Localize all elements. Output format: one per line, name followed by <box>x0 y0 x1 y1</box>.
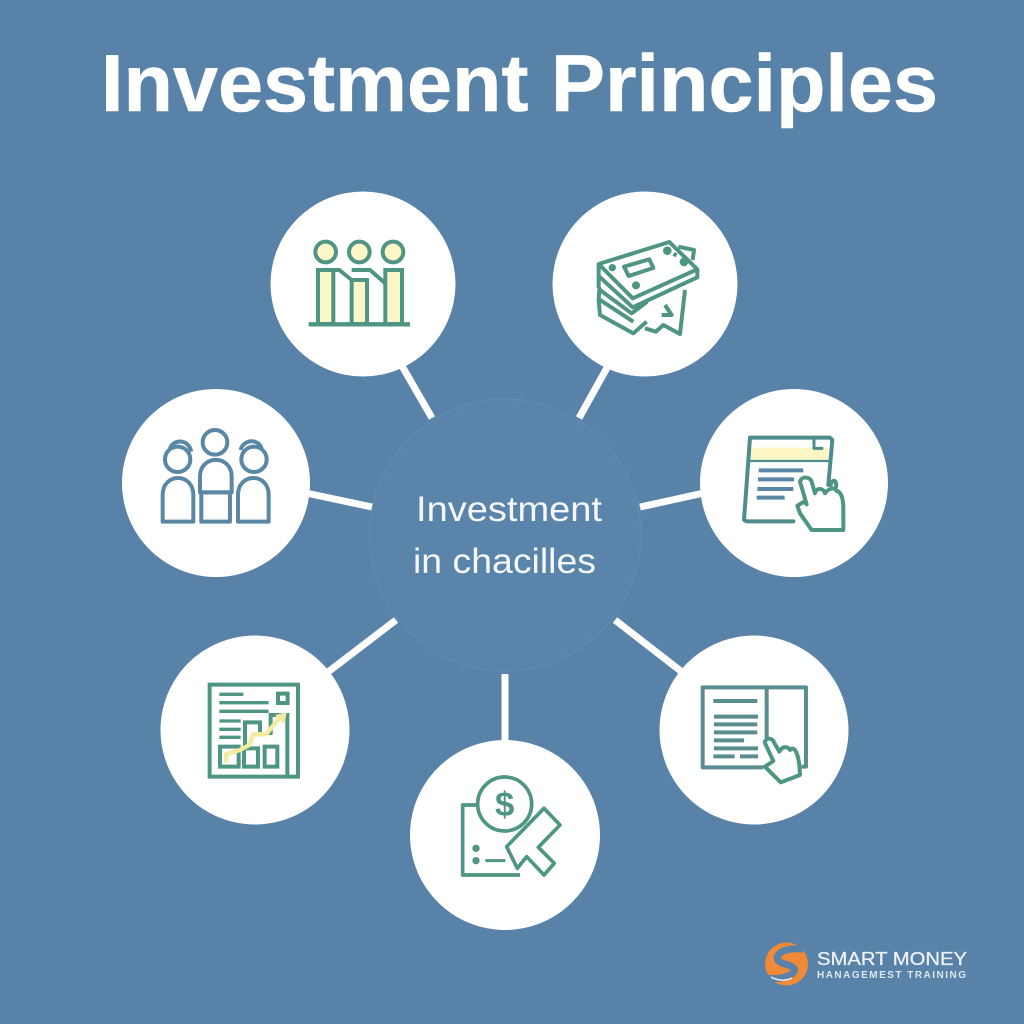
icon: three figures on columns <box>309 242 410 324</box>
center hub: investment in chacilles: in chacilles <box>413 542 596 581</box>
panel: stack of banknotes <box>552 192 738 376</box>
panel: report with growth chart <box>160 636 350 824</box>
center hub: investment in chacilles <box>369 399 641 671</box>
logo: smart money management training: HANAGEMEST TRAINING <box>817 970 966 981</box>
logo: smart money management training <box>765 942 967 986</box>
center hub: investment in chacilles: Investment <box>416 490 602 529</box>
icon: banknote stack <box>599 242 697 334</box>
title: Investment Principles <box>101 39 938 129</box>
panel: group of people <box>122 389 310 577</box>
panel: people with pillars <box>270 192 456 376</box>
panel: dollar coin and stamp <box>410 740 600 930</box>
logo: smart money management training: SMART MONEY <box>817 949 967 969</box>
icon: report chart <box>210 685 298 777</box>
icon: book and hand <box>703 687 806 782</box>
icon: orange swirl <box>765 942 808 986</box>
icon: three people <box>163 430 269 522</box>
panel: document with pointing hand <box>700 389 888 577</box>
icon: dollar document with arrow <box>463 777 560 875</box>
icon: form and hand <box>744 438 843 530</box>
connector lines <box>306 366 704 745</box>
icon: dollar document with arrow: $ <box>495 786 514 824</box>
panel: open book with hand <box>660 636 848 824</box>
